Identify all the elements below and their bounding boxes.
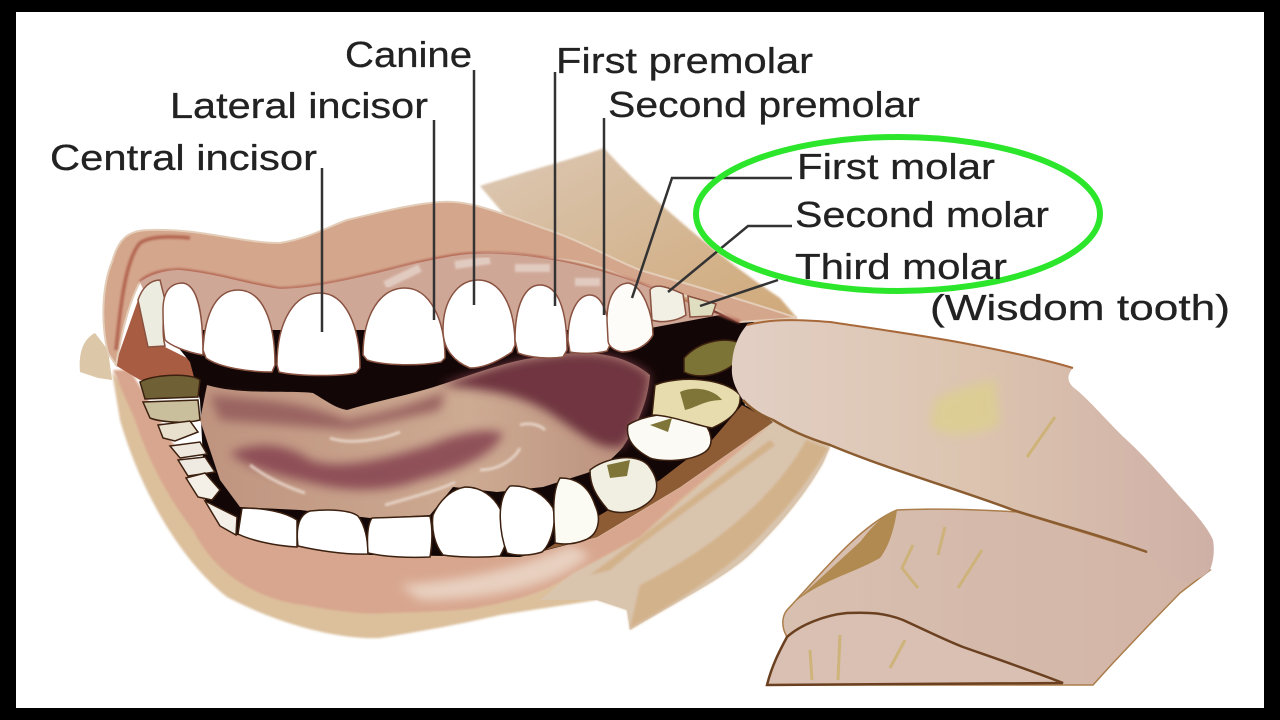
tongue purple back bbox=[440, 353, 650, 448]
tooth: canine bbox=[443, 280, 515, 368]
finger crease bbox=[743, 400, 1147, 552]
line: lateral incisor bbox=[433, 120, 435, 320]
lower chin skin bbox=[112, 372, 830, 638]
lower left molars bbox=[140, 375, 200, 399]
line: first premolar bbox=[554, 72, 556, 306]
lower lip highlight bbox=[400, 545, 590, 600]
line: first molar bbox=[632, 178, 792, 298]
upper finger bbox=[732, 320, 1214, 581]
cheek flap behind upper lip bbox=[480, 148, 797, 325]
lower teeth bbox=[140, 340, 740, 557]
tongue highlights bbox=[250, 424, 545, 505]
label: lateral incisor: Lateral incisor bbox=[170, 85, 428, 126]
line: central incisor bbox=[321, 168, 323, 332]
tooth: lateral incisor bbox=[363, 288, 445, 365]
upper lip bbox=[103, 202, 797, 365]
lower canine bbox=[432, 487, 507, 557]
lower premolars bbox=[500, 486, 554, 555]
right lower gum bbox=[545, 405, 773, 550]
molar stains bbox=[607, 389, 722, 478]
tongue bbox=[200, 353, 650, 518]
finger knuckle bbox=[767, 613, 1063, 685]
lower lip pink bbox=[113, 370, 773, 614]
tooth: first premolar bbox=[515, 285, 567, 358]
line: canine bbox=[473, 70, 475, 305]
finger nail lines bbox=[810, 417, 1055, 680]
illustration: open mouth bbox=[80, 148, 830, 638]
brown knuckle patch bbox=[790, 510, 897, 606]
lower finger bbox=[767, 509, 1210, 685]
label: wisdom tooth: (Wisdom tooth) bbox=[930, 287, 1230, 328]
upper left molar bbox=[138, 280, 165, 347]
gum highlights bbox=[385, 260, 600, 285]
label: first molar: First molar bbox=[797, 146, 995, 187]
upper left lateral bbox=[203, 290, 275, 372]
tooth: first molar bbox=[607, 283, 653, 352]
label: second molar: Second molar bbox=[795, 194, 1049, 235]
lower right molars bbox=[590, 458, 657, 512]
upper gum bbox=[140, 254, 720, 330]
tongue dark shadow bbox=[210, 392, 445, 430]
tooth: central incisor bbox=[277, 293, 360, 376]
leader lines bbox=[322, 70, 792, 332]
highlight ellipse: molars bbox=[696, 137, 1100, 291]
line: second premolar bbox=[603, 118, 605, 315]
label: second premolar: Second premolar bbox=[608, 84, 920, 125]
label: first premolar: First premolar bbox=[556, 40, 813, 81]
lower left incisors bbox=[238, 508, 297, 547]
upper molar tooth bbox=[163, 283, 203, 355]
label: canine: Canine bbox=[345, 34, 472, 75]
finger stains bbox=[930, 378, 1000, 434]
mouth corner skin bbox=[80, 333, 112, 380]
fingers bbox=[732, 320, 1214, 685]
label: third molar: Third molar bbox=[795, 246, 1007, 287]
labels bbox=[50, 34, 1230, 328]
label: central incisor: Central incisor bbox=[50, 137, 317, 178]
left cheek interior bbox=[115, 300, 205, 380]
finger top edge bbox=[747, 320, 1073, 368]
lower lip flap bbox=[540, 422, 830, 630]
line: third molar bbox=[700, 280, 778, 306]
tooth: third molar bbox=[688, 296, 716, 317]
tooth: second molar bbox=[650, 286, 686, 322]
mouth interior bbox=[160, 305, 773, 557]
flap tan edges bbox=[590, 440, 828, 628]
tongue stains bbox=[230, 431, 503, 490]
line: second molar bbox=[668, 226, 792, 292]
lip red edges bbox=[116, 237, 740, 350]
tooth: second premolar bbox=[568, 295, 610, 353]
upper teeth bbox=[138, 280, 716, 376]
